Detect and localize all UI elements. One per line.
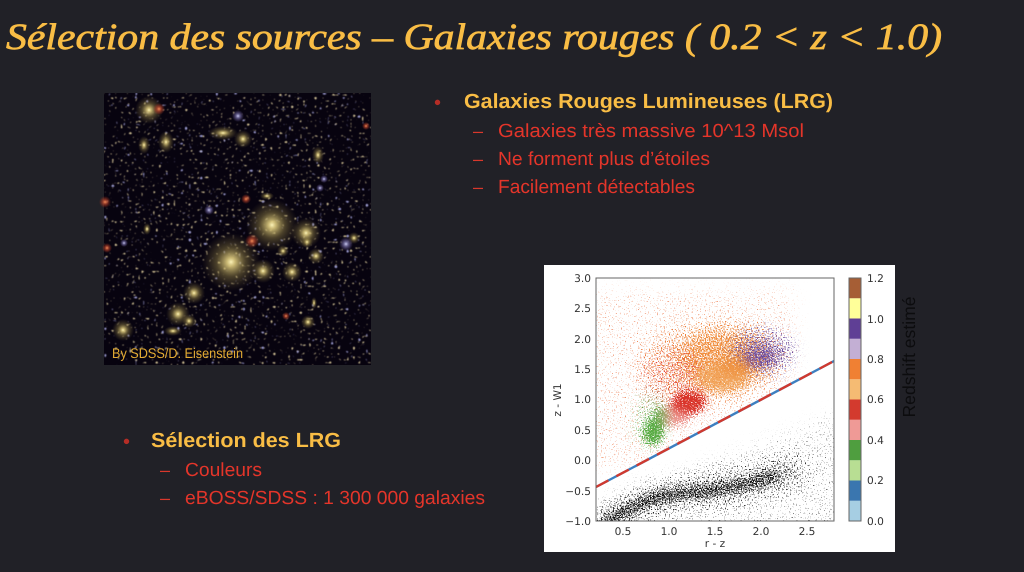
y axis tick labels xyxy=(565,273,591,528)
y axis tick labels: −0.5 xyxy=(565,486,591,498)
galaxies xyxy=(99,96,370,341)
y axis label: z - W1 xyxy=(552,383,564,417)
x axis tick labels: 2.5 xyxy=(799,526,815,538)
y axis tick labels: 3.0 xyxy=(574,273,591,285)
panel: galaxy cluster image xyxy=(99,93,371,365)
y axis tick labels: 1.0 xyxy=(574,394,591,406)
text block: LRG selection xyxy=(123,429,485,509)
chart: colour-colour scatter plot xyxy=(544,265,919,552)
colour bar tick labels: 0.0 xyxy=(867,516,884,528)
bullet: massive: – xyxy=(473,121,483,141)
heading: Galaxies Rouges Lumineuses: • xyxy=(434,92,441,114)
text block: LRG description xyxy=(434,90,833,198)
colour bar tick labels: 0.8 xyxy=(867,354,884,366)
image credit: By SDSS/D. Eisenstein xyxy=(112,345,243,361)
bullet: detectable: Facilement détectables xyxy=(498,177,695,198)
bullet: colours: Couleurs xyxy=(185,460,262,481)
colour bar xyxy=(849,278,861,521)
bullet: eBOSS/SDSS: – xyxy=(160,488,170,508)
selection line xyxy=(596,361,834,487)
y axis tick labels: 2.0 xyxy=(574,334,591,346)
colour bar tick labels: 0.4 xyxy=(867,435,884,447)
bullet: detectable: – xyxy=(473,177,483,197)
y axis tick labels: 0.0 xyxy=(574,455,591,467)
y axis tick labels: 1.5 xyxy=(574,364,591,376)
scatter: coloured points above the cut xyxy=(580,290,795,470)
title: Sélection des sources – Galaxies rouges ( 0.2 < z < 1.0) xyxy=(6,17,942,58)
heading: Sélection des LRG: Sélection des LRG xyxy=(151,429,341,452)
y axis tick labels: 0.5 xyxy=(574,425,591,437)
bullet: no star formation: – xyxy=(473,149,483,169)
axes frame xyxy=(596,278,834,521)
x axis tick labels: 1.0 xyxy=(661,526,678,538)
y axis tick labels: 2.5 xyxy=(574,303,591,315)
bullet: no star formation: Ne forment plus d’étoiles xyxy=(498,149,710,170)
colour bar title: Redshift estimé xyxy=(899,296,919,418)
x axis tick labels: 2.0 xyxy=(753,526,770,538)
scatter: black points below the cut xyxy=(596,406,834,520)
colour bar tick labels xyxy=(867,273,884,528)
x axis tick labels: 1.5 xyxy=(707,526,723,538)
star field xyxy=(104,93,371,365)
colour bar tick labels: 0.2 xyxy=(867,475,884,487)
bullet: massive: Galaxies très massive 10^13 Msol xyxy=(498,121,804,142)
bullet: eBOSS/SDSS: eBOSS/SDSS : 1 300 000 galaxies xyxy=(185,488,485,509)
heading: Sélection des LRG: • xyxy=(123,431,130,453)
x axis tick labels: 0.5 xyxy=(615,526,631,538)
heading: Galaxies Rouges Lumineuses: Galaxies Rouges Lumineuses (LRG) xyxy=(464,90,833,113)
x axis tick labels xyxy=(615,526,815,538)
colour bar tick labels: 1.2 xyxy=(867,273,884,285)
colour bar tick labels: 0.6 xyxy=(867,394,884,406)
colour bar tick labels: 1.0 xyxy=(867,314,884,326)
x axis label: r - z xyxy=(705,538,726,550)
y axis tick labels: −1.0 xyxy=(565,516,591,528)
bullet: colours: – xyxy=(160,460,170,480)
